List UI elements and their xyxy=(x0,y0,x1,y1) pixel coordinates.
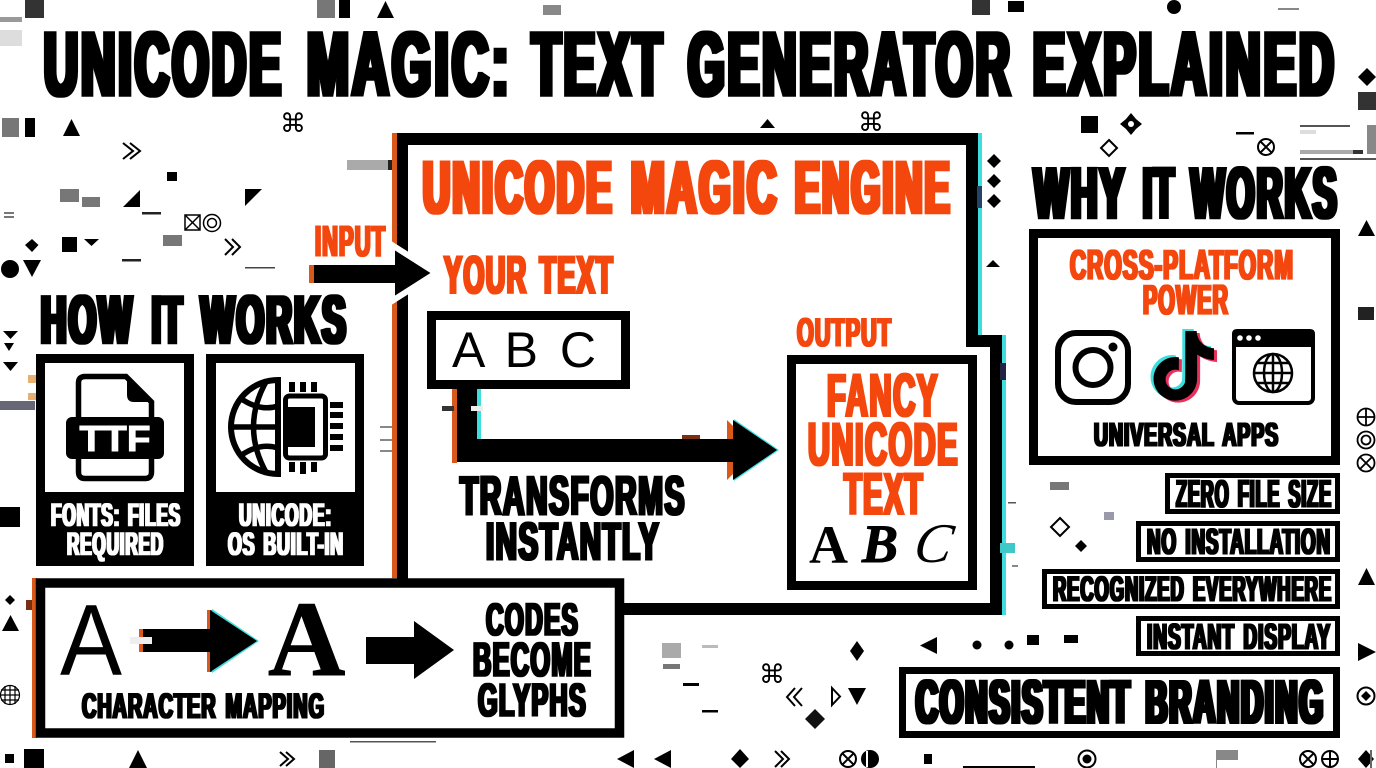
icon: TTF file xyxy=(66,375,164,478)
panel: Unicode Magic Engine: ENGINE xyxy=(795,146,952,229)
arrow: to glyphs xyxy=(366,621,454,679)
arrow: mapping xyxy=(130,609,259,673)
panel: cross-platform power: POWER xyxy=(1143,276,1229,323)
title: UNICODE xyxy=(44,15,284,115)
panel: cross-platform power xyxy=(1034,234,1336,460)
card: fonts files required xyxy=(36,354,194,566)
panel: character mapping: A xyxy=(268,581,345,699)
icon: globe and chip xyxy=(230,380,343,474)
output box: fancy unicode text: C xyxy=(910,513,959,575)
caption: transforms instantly: INSTANTLY xyxy=(486,512,660,572)
heading: how it works: WORKS xyxy=(201,282,348,358)
heading: why it works: WHY xyxy=(1034,154,1126,234)
panel: character mapping: GLYPHS xyxy=(478,674,587,726)
panel: Unicode Magic Engine xyxy=(392,133,1015,615)
panel: character mapping: CODES xyxy=(486,594,579,645)
card: unicode os built-in xyxy=(206,354,364,566)
heading: engine: MAGIC xyxy=(631,146,779,229)
caption: transforms instantly: TRANSFORMS xyxy=(460,464,686,526)
heading: why it works: IT xyxy=(1143,154,1176,234)
label: output: OUTPUT xyxy=(797,311,892,355)
output box: fancy unicode text: A xyxy=(809,515,848,575)
output box: fancy unicode text: B xyxy=(861,514,898,574)
output box: fancy unicode text: TEXT xyxy=(844,462,924,527)
panel: character mapping xyxy=(32,578,620,738)
output box: fancy unicode text: FANCY xyxy=(827,362,939,429)
panel: character mapping: CHARACTER MAPPING xyxy=(82,687,325,726)
panel: character mapping: A xyxy=(60,585,123,697)
heading: how it works: IT xyxy=(152,282,184,358)
card: fonts files required: FONTS: FILES xyxy=(51,497,181,533)
output box: fancy unicode text xyxy=(792,360,972,586)
title: TEXT xyxy=(532,15,665,115)
icon: instagram xyxy=(1058,333,1128,402)
icon: tiktok xyxy=(1151,329,1217,403)
text: INPUT xyxy=(315,217,386,266)
caption: transforms instantly xyxy=(460,464,686,572)
arrow: transforms xyxy=(442,389,779,481)
title: GENERATOR xyxy=(688,15,1013,115)
sample input box: A B C xyxy=(452,322,596,378)
panel: character mapping: BECOME xyxy=(473,634,592,687)
background glyph scatter: ⌘ xyxy=(858,108,884,138)
arrow: input xyxy=(309,245,436,301)
label: your text: YOUR TEXT xyxy=(444,246,614,305)
title: MAGIC: xyxy=(307,15,512,115)
icon: browser globe xyxy=(1232,329,1315,403)
output box: fancy unicode text: UNICODE xyxy=(808,411,959,478)
background glyph scatter: ⌘ xyxy=(280,109,306,139)
card: unicode os built-in: OS BUILT-IN xyxy=(228,526,344,562)
sample input box xyxy=(432,316,626,384)
background glyph scatter: ⌘ xyxy=(759,660,785,690)
card: fonts files required: REQUIRED xyxy=(67,526,164,562)
icon: TTF file: TTF xyxy=(80,418,150,459)
card: unicode os built-in: UNICODE: xyxy=(239,497,332,533)
heading: engine: UNICODE xyxy=(423,146,614,229)
heading: how it works: HOW xyxy=(41,282,134,358)
